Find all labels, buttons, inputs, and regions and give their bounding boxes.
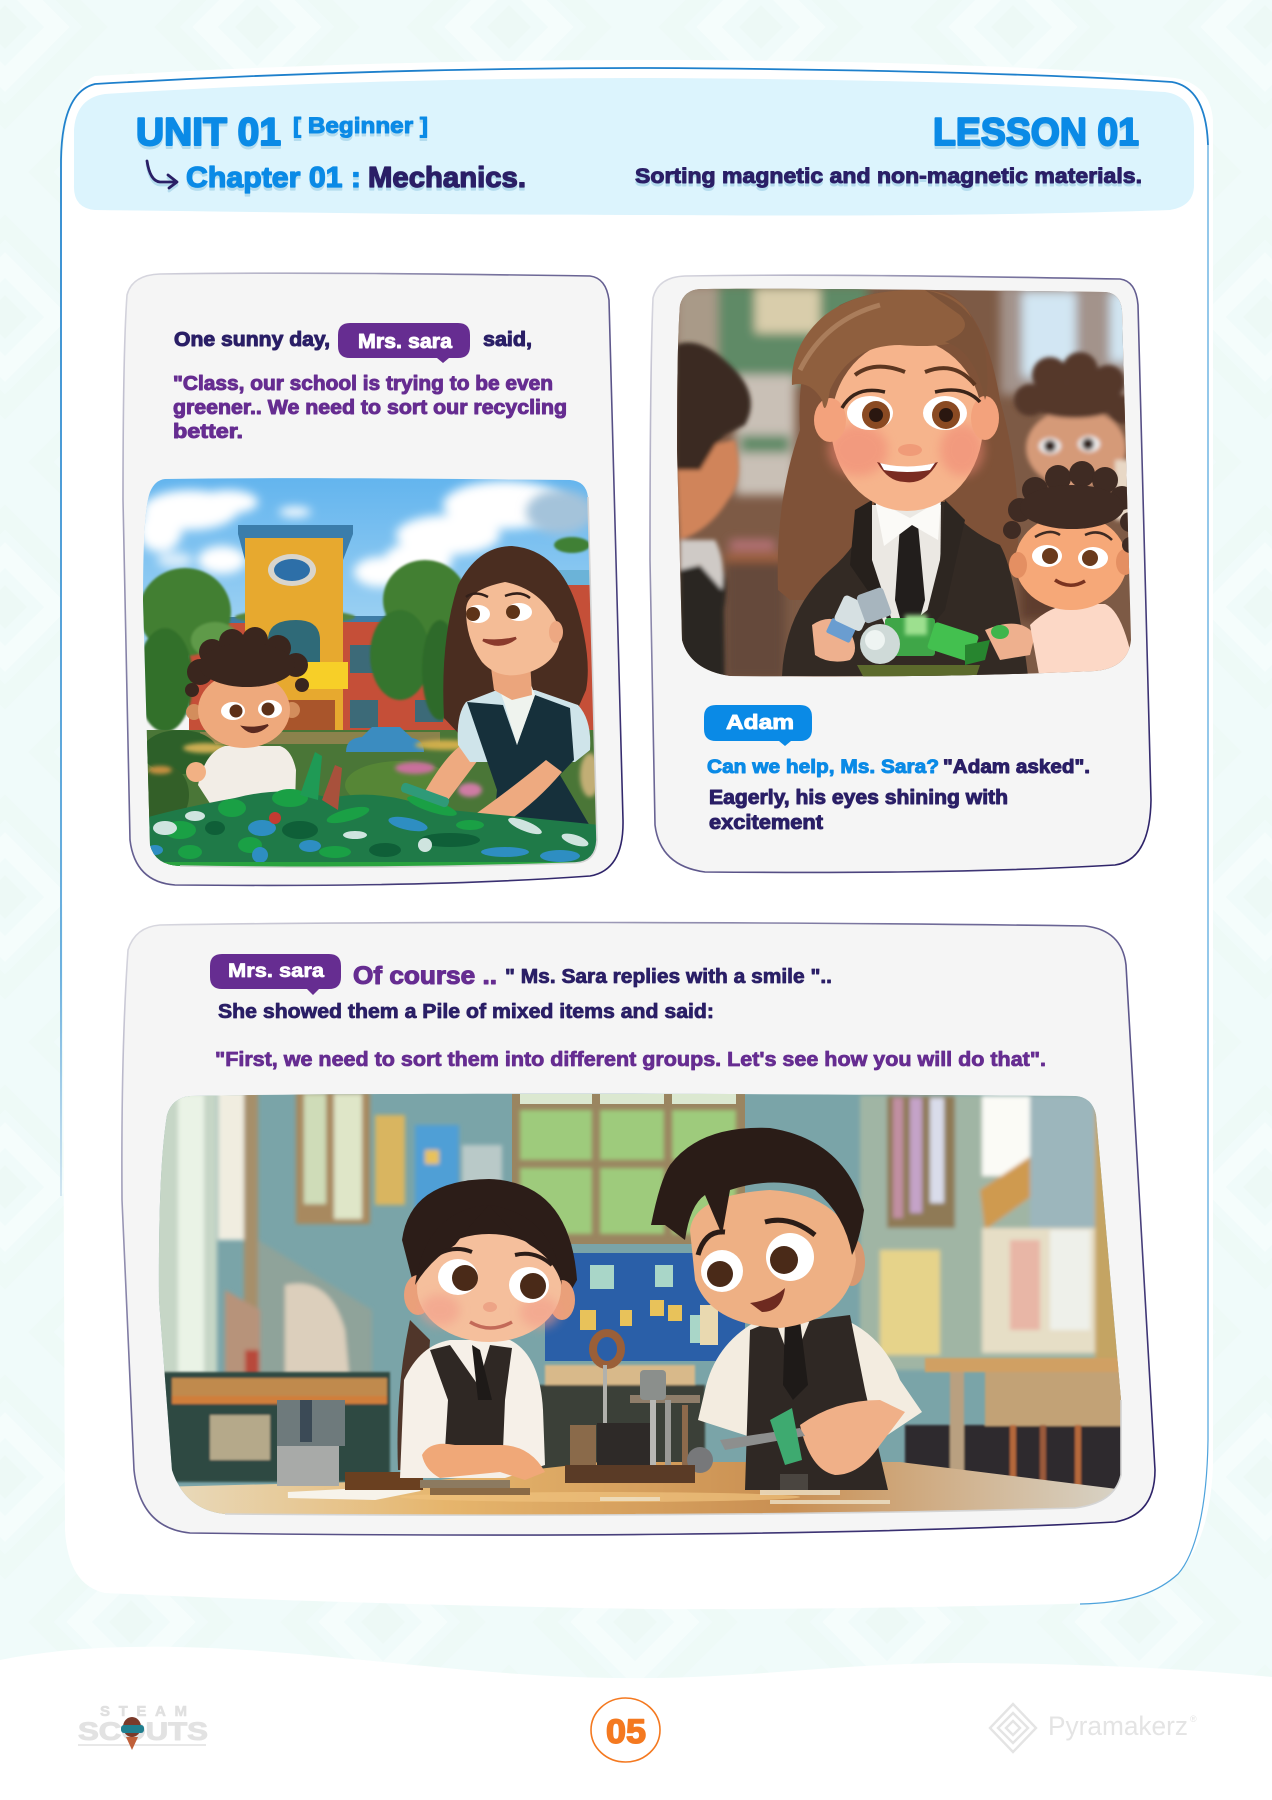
lesson subtitle: Sorting magnetic and non-magnetic materials. xyxy=(635,164,1142,188)
footer logo: Pyramakerz: ® xyxy=(1190,1714,1197,1724)
left boy back view xyxy=(676,342,751,680)
right wall xyxy=(860,1095,1125,1400)
chapter label: Chapter 01 : xyxy=(186,162,361,194)
teacher xyxy=(778,290,1028,676)
intro text: One sunny day, xyxy=(174,329,330,351)
speech tag: Mrs. sara: Mrs. sara xyxy=(228,961,324,982)
page number: 05 xyxy=(606,1713,646,1751)
footer logo: STEAM SCOUTS xyxy=(78,1703,208,1750)
boy xyxy=(651,1128,922,1490)
speech tag: Mrs. sara xyxy=(338,323,470,363)
page number xyxy=(591,1698,660,1762)
table xyxy=(180,1462,1114,1514)
narration text: excitement xyxy=(709,812,823,834)
left wall and windows xyxy=(155,1090,502,1390)
chrome pot xyxy=(277,1400,345,1486)
woman xyxy=(426,546,590,824)
panel: Adam offers help xyxy=(650,275,1151,872)
unit title: UNIT 01 xyxy=(136,111,281,154)
back boy xyxy=(1014,352,1136,520)
teacher quote: better. xyxy=(173,421,243,443)
footer logo: Pyramakerz xyxy=(990,1704,1197,1752)
illustration: teacher sorting recycling xyxy=(675,285,1140,680)
footer logo: STEAM SCOUTS: SCOUTS xyxy=(78,1718,208,1746)
speech tag: Adam: Adam xyxy=(726,712,794,734)
boy xyxy=(185,627,309,805)
building xyxy=(189,620,596,738)
tower xyxy=(245,538,343,730)
speech tag: Mrs. sara: Mrs. sara xyxy=(358,331,453,353)
icon: chapter arrow xyxy=(147,161,177,188)
trees xyxy=(137,537,590,732)
recycling bin and hands xyxy=(812,586,1035,680)
girl xyxy=(398,1179,577,1488)
car xyxy=(346,727,424,752)
narration text: Eagerly, his eyes shining with xyxy=(709,787,1008,809)
narration line two: She showed them a Pile of mixed items and said: xyxy=(218,1001,714,1023)
panel: children sorting mixed items xyxy=(122,922,1155,1535)
illustration: school garden with bottles xyxy=(137,475,600,870)
Adam boy xyxy=(1003,461,1130,674)
icon: diamond xyxy=(990,1704,1036,1752)
of course reply: Of course .. xyxy=(353,962,497,990)
teacher quote: "Class, our school is trying to be even xyxy=(173,373,553,395)
header band xyxy=(74,78,1194,215)
mechanical model xyxy=(430,1333,808,1495)
panel: teacher speaks outside school xyxy=(123,273,623,885)
main page frame xyxy=(61,60,1213,1609)
footer logo: STEAM SCOUTS: STEAM xyxy=(100,1703,187,1720)
teacher instruction quote: "First, we need to sort them into different groups. Let's see how you will do that". xyxy=(215,1049,1046,1071)
footer white wave xyxy=(0,1647,1272,1800)
Adam asked: "Adam asked". xyxy=(943,756,1090,778)
narration text xyxy=(709,787,1008,834)
Adam question: Can we help, Ms. Sara? xyxy=(707,756,939,778)
teacher quote: greener.. We need to sort our recycling xyxy=(173,397,567,419)
center window xyxy=(512,1094,745,1244)
bottles pile xyxy=(145,752,600,870)
beginner tag: [ Beginner ] xyxy=(293,113,428,138)
lesson title: LESSON 01 xyxy=(933,111,1139,154)
footer logo: Pyramakerz: Pyramakerz xyxy=(1048,1711,1188,1741)
said text: said, xyxy=(483,329,532,351)
desks xyxy=(160,1358,1125,1500)
illustration: children at a workbench xyxy=(155,1090,1125,1520)
teacher quote xyxy=(173,373,567,443)
narration: " Ms. Sara replies with a smile ".. xyxy=(505,966,832,988)
garden xyxy=(140,730,600,870)
chapter name: Mechanics. xyxy=(368,162,526,194)
notice board xyxy=(545,1253,745,1361)
icon: rocket xyxy=(121,1717,144,1750)
speech tag: Adam xyxy=(704,705,812,746)
speech tag: Mrs. sara xyxy=(210,954,341,995)
